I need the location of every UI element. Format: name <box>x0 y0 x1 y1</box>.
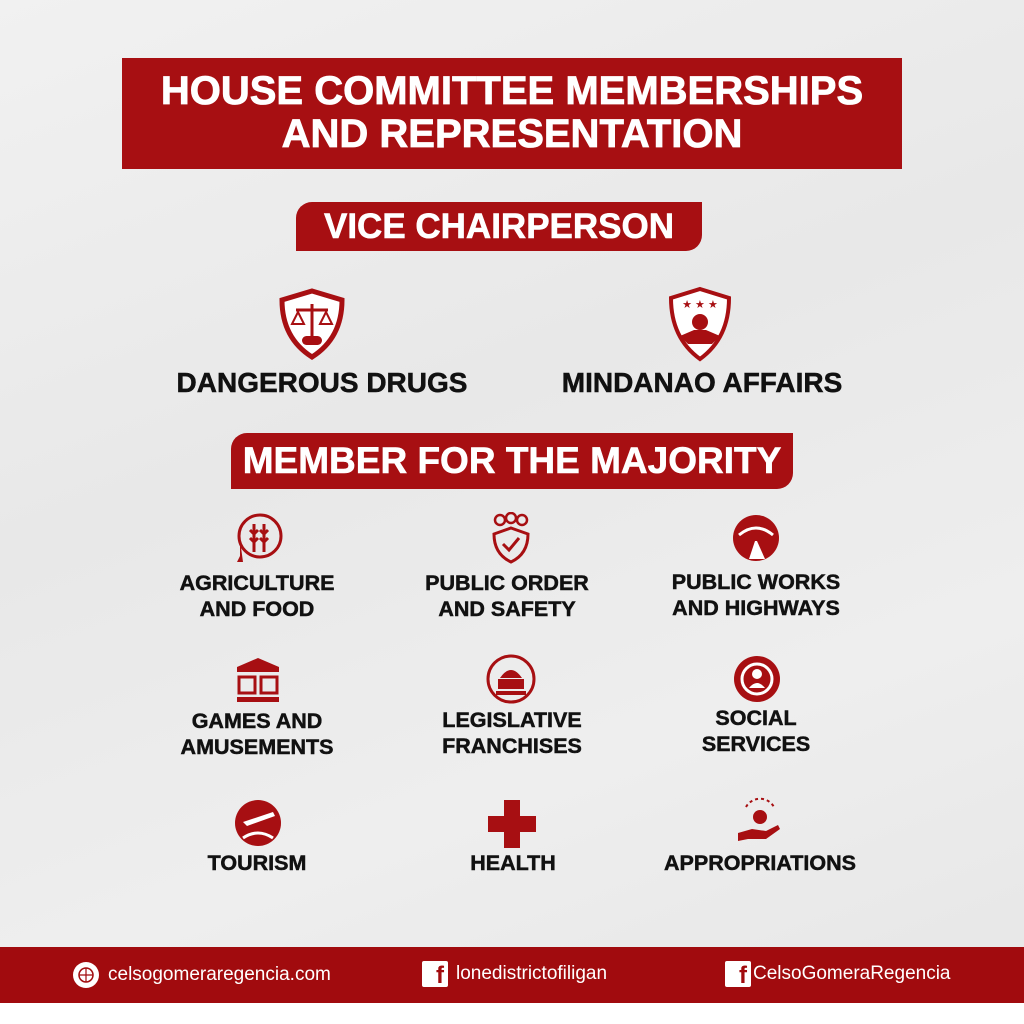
label: legislative franchises: FRANCHISES <box>442 734 582 758</box>
label: public works and highways: PUBLIC WORKS <box>672 570 840 594</box>
label: games and amusements: GAMES AND <box>192 709 322 733</box>
footer bar <box>0 947 1024 1003</box>
icon: mindanao affairs shield: ★ ★ ★ <box>682 299 718 311</box>
icon: games and amusements <box>237 658 279 702</box>
footer: facebook celsogomeraregencia: f <box>739 962 747 989</box>
label: social services <box>702 706 810 756</box>
icon: tourism <box>235 800 281 846</box>
footer: facebook lonedistrictofiligan <box>422 961 607 989</box>
footer: facebook lonedistrictofiligan: lonedistrictofiligan <box>456 963 607 984</box>
label: social services: SERVICES <box>702 732 810 756</box>
label: legislative franchises: LEGISLATIVE <box>442 708 582 732</box>
label: public works and highways <box>672 570 840 620</box>
title: AND REPRESENTATION <box>282 112 742 156</box>
label: mindanao affairs: MINDANAO AFFAIRS <box>562 367 842 398</box>
label: social services: SOCIAL <box>715 706 797 730</box>
label: agriculture and food: AND FOOD <box>200 597 314 621</box>
banner: member for the majority: MEMBER FOR THE MAJORITY <box>243 440 781 481</box>
icon: agriculture <box>237 514 282 562</box>
banner: vice chairperson <box>296 202 702 251</box>
footer: website: celsogomeraregencia.com <box>108 964 331 985</box>
label: public order and safety <box>425 571 589 621</box>
label: public works and highways: AND HIGHWAYS <box>672 596 840 620</box>
icon: public works <box>733 515 779 561</box>
label: health: HEALTH <box>470 851 556 875</box>
icon: dangerous drugs shield <box>280 288 344 360</box>
label: appropriations: APPROPRIATIONS <box>664 851 856 875</box>
icon: health cross <box>488 800 536 848</box>
label: tourism: TOURISM <box>208 851 306 875</box>
banner: vice chairperson: VICE CHAIRPERSON <box>324 207 674 246</box>
label: agriculture and food <box>180 571 334 621</box>
label: agriculture and food: AGRICULTURE <box>180 571 334 595</box>
title <box>122 58 902 169</box>
footer: facebook lonedistrictofiligan: f <box>436 962 444 989</box>
label: dangerous drugs: DANGEROUS DRUGS <box>177 367 467 398</box>
title: HOUSE COMMITTEE MEMBERSHIPS <box>161 69 863 113</box>
label: public order and safety: PUBLIC ORDER <box>425 571 589 595</box>
label: games and amusements: AMUSEMENTS <box>181 735 333 759</box>
icon: mindanao affairs shield <box>669 286 731 362</box>
footer: facebook celsogomeraregencia: CelsoGomeraRegencia <box>753 963 950 984</box>
footer: website <box>73 962 331 988</box>
footer: facebook celsogomeraregencia <box>725 961 950 989</box>
icon: appropriations <box>738 798 780 841</box>
icon: social services <box>734 656 780 702</box>
label: games and amusements <box>180 709 333 759</box>
label: public order and safety: AND SAFETY <box>438 597 576 621</box>
label: legislative franchises <box>442 708 582 758</box>
icon: public order <box>492 512 530 564</box>
icon: legislative franchises <box>486 654 536 704</box>
